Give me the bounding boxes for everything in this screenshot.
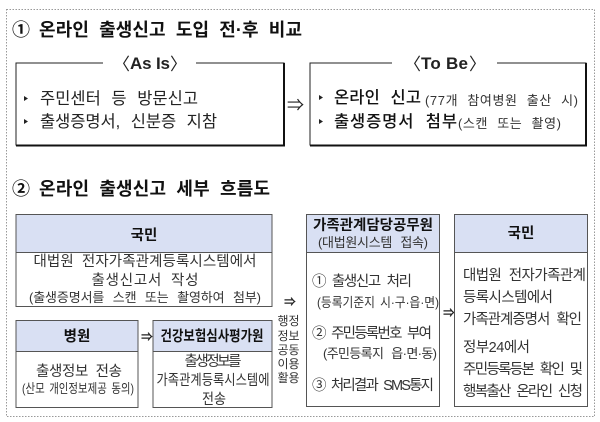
panel: citizen result: 대법원 전자가족관계: [463, 267, 586, 284]
arrow: to officer: ⇒: [284, 295, 296, 309]
panel: family relations officer: (대법원시스템 접속): [318, 235, 428, 250]
panel: As Is: As Is: [130, 54, 170, 73]
heading: flow: 온라인 출생신고 세부 흐름도: [39, 179, 270, 199]
panel: As Is: 〉: [170, 55, 187, 74]
panel: To Be: To Be: [421, 54, 468, 73]
panel: citizen filing: 국민: [131, 227, 157, 244]
panel: To Be: (스캔 또는 촬영): [458, 116, 561, 131]
panel: hospital: (산모 개인정보제공 동의): [22, 381, 134, 396]
panel: family relations officer: ① 출생신고 처리: [312, 273, 412, 290]
panel: To Be: 〈: [404, 55, 421, 74]
panel: family relations officer: ② 주민등록번호 부여: [312, 325, 432, 342]
panel: hospital: 병원: [64, 328, 90, 345]
panel: citizen filing: (출생증명서를 스캔 또는 촬영하여 첨부): [29, 290, 261, 305]
label: shared administrative information: [277, 313, 300, 385]
panel: As Is: 출생증명서, 신분증 지참: [40, 112, 217, 131]
panel: HIRA: 건강보험심사평가원: [160, 328, 264, 345]
panel: family relations officer: [306, 214, 440, 406]
panel: To Be: 출생증명서 첨부: [334, 112, 457, 131]
panel: To Be: [310, 54, 586, 146]
panel: To Be: (77개 참여병원 출산 시): [425, 93, 578, 108]
panel: hospital: 출생정보 전송: [36, 363, 122, 380]
panel: citizen result: 가족관계증명서 확인: [463, 311, 582, 328]
panel: citizen result: 정부24에서: [463, 339, 530, 356]
label: shared administrative information: 이용: [277, 357, 300, 371]
panel: citizen result: 주민등록등본 확인 및: [463, 361, 583, 378]
panel: citizen result: 행복출산 온라인 신청: [463, 383, 583, 400]
label: shared administrative information: 정보: [277, 329, 300, 343]
panel: citizen result: 등록시스템에서: [463, 289, 553, 306]
panel: citizen result: 국민: [508, 225, 534, 242]
panel: citizen filing: [16, 214, 272, 306]
arrow: As Is to To Be: ⇒: [287, 96, 304, 115]
arrow: to citizen: ⇒: [443, 306, 455, 320]
panel: citizen result: [454, 214, 588, 406]
panel: To Be: 〉: [469, 55, 486, 74]
panel: As Is: [16, 54, 284, 146]
panel: HIRA: 전송: [202, 391, 226, 408]
panel: family relations officer: ③ 처리결과 SMS통지: [312, 377, 434, 394]
panel: family relations officer: 가족관계담당공무원: [313, 217, 433, 234]
panel: HIRA: 가족관계등록시스템에: [156, 372, 270, 389]
heading: flow: ②: [12, 179, 30, 199]
panel: family relations officer: (주민등록지 읍·면·동): [323, 346, 437, 361]
panel: citizen filing: 출생신고서 작성: [92, 272, 198, 289]
label: shared administrative information: 행정: [277, 313, 300, 328]
heading: comparison: ①: [12, 20, 30, 40]
label: shared administrative information: 공동: [277, 343, 300, 357]
panel: family relations officer: (등록기준지 시·구·읍·면): [317, 295, 439, 310]
heading: comparison: 온라인 출생신고 도입 전·후 비교: [39, 20, 302, 40]
panel: To Be: 온라인 신고: [334, 88, 421, 107]
arrow: hospital to HIRA: ⇒: [141, 330, 153, 344]
panel: citizen filing: 대법원 전자가족관계등록시스템에서: [34, 253, 256, 270]
panel: As Is: 주민센터 등 방문신고: [40, 89, 198, 108]
panel: HIRA: [153, 320, 272, 408]
label: shared administrative information: 활용: [277, 371, 300, 385]
panel: HIRA: 출생정보를: [184, 353, 242, 370]
panel: As Is: 〈: [113, 55, 130, 74]
panel: hospital: [16, 320, 138, 408]
